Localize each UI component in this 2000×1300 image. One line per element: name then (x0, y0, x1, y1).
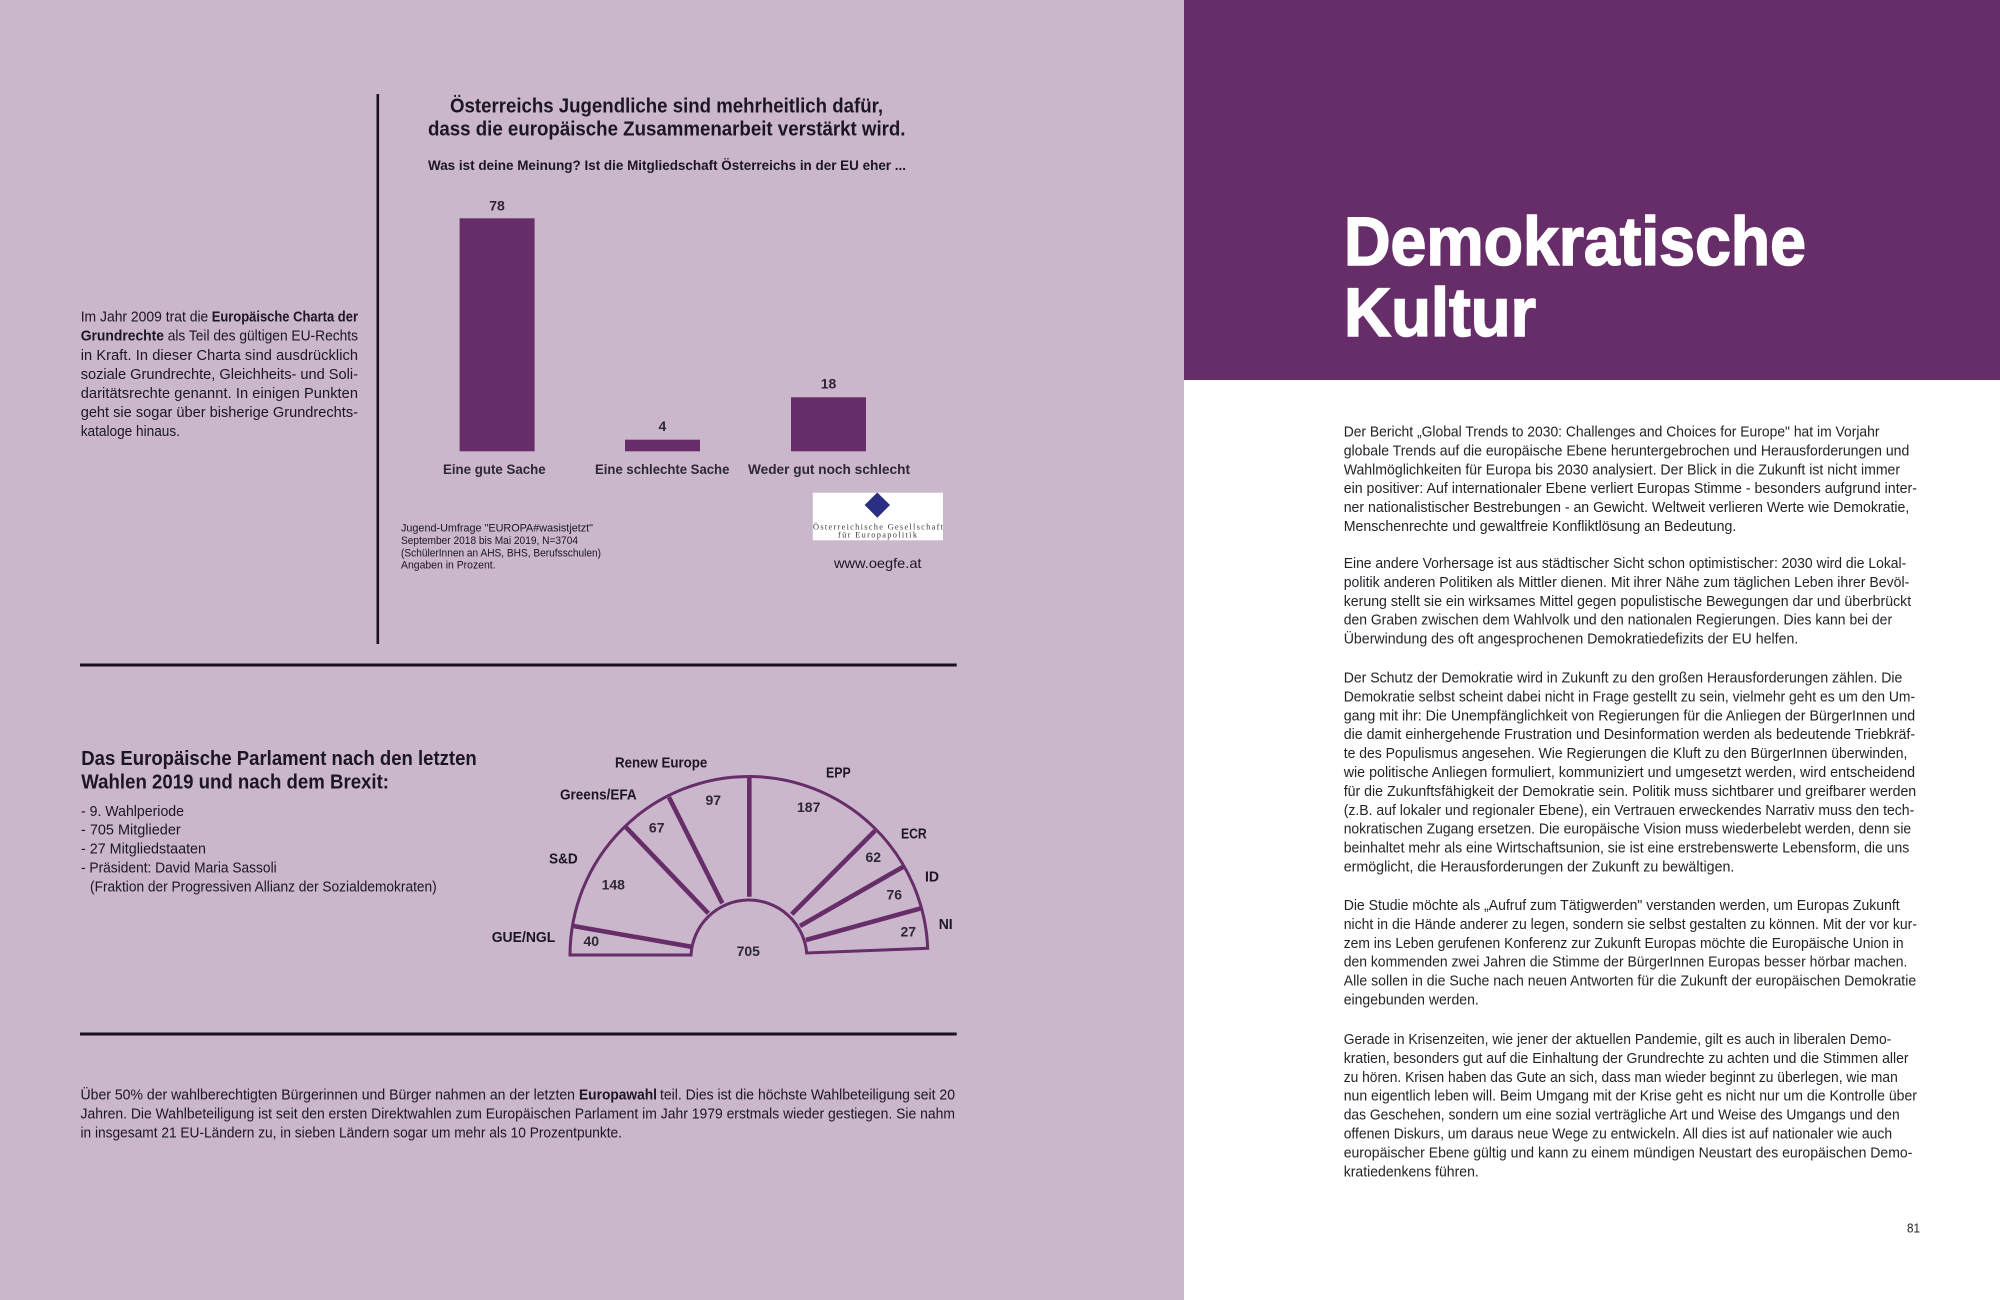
text block: article paragraph 4: nicht in die Hände anderer zu legen, sondern sie selbst gestalten zu können. Mit der vor kur- (1344, 917, 1917, 933)
text block: Charta der Grundrechte: als Teil des gültigen EU-Rechts (168, 329, 358, 345)
text block: article paragraph 3: Demokratie selbst scheint dabei nicht in Frage gestellt zu sein, vielmehr geht es um den Um- (1344, 689, 1915, 705)
heading: Europäisches Parlament (81, 747, 477, 793)
text block: article paragraph 2 (1344, 556, 1911, 648)
text block: parliament facts list: - 9. Wahlperiode (81, 804, 184, 820)
text block: article paragraph 5: kratiedenkens führen. (1344, 1164, 1479, 1180)
text block: article paragraph 4 (1344, 898, 1917, 1008)
text block: article paragraph 1: ner nationalistischer Bestrebungen - an Gewicht. Weltweit verlieren Werte wie Demokratie, (1344, 500, 1909, 516)
bar: Eine schlechte Sache 4: Eine schlechte Sache (595, 461, 730, 477)
text block: survey source note: (SchülerInnen an AHS, BHS, Berufsschulen) (401, 548, 601, 560)
bar: Eine schlechte Sache 4: 4 (659, 418, 667, 434)
text block: article paragraph 5: kratien, besonders gut auf die Einhaltung der Grundrechte zu achten und die Stimmen aller (1344, 1051, 1909, 1067)
text block: Europawahl turnout (80, 1085, 955, 1142)
text block: article paragraph 4: eingebunden werden. (1344, 992, 1479, 1008)
logo: Österreichische Gesellschaft für Europapolitik: Österreichische Gesellschaft (813, 522, 944, 531)
hemicycle seat counts (584, 792, 916, 959)
hemicycle seat counts: 40 (584, 933, 599, 949)
bar: Eine schlechte Sache 4 (595, 418, 730, 477)
hemicycle group names: Greens/EFA (560, 787, 637, 803)
text block: article paragraph 3: ermöglicht, die Herausforderungen der Zukunft zu bewältigen. (1344, 860, 1734, 876)
title: Demokratische Kultur: Demokratische (1344, 203, 1806, 280)
text block: article paragraph 3 (1343, 670, 1916, 876)
bar: Eine gute Sache 78: Eine gute Sache (443, 461, 546, 477)
hemicycle group names (492, 755, 953, 946)
panel: left lilac page background (0, 0, 1184, 1300)
text block: article paragraph 5: das Geschehen, sondern um eine sozial verträgliche Art und Weise des Umgangs und den (1344, 1108, 1900, 1124)
bar: Weder gut noch schlecht 18 (748, 376, 910, 477)
text block: article paragraph 2: den Graben zwischen dem Wahlvolk und den nationalen Regierungen. Dies kann bei der (1344, 613, 1892, 629)
title: Demokratische Kultur (1344, 203, 1806, 351)
text block: article paragraph 1: Menschenrechte und gewaltfreie Konfliktlösung an Bedeutung. (1344, 519, 1736, 535)
text block: Charta der Grundrechte: daritätsrechte genannt. In einigen Punkten (81, 386, 358, 402)
text block: article paragraph 4: Alle sollen in die Suche nach neuen Antworten für die Zukunft der europäischen Demokratie (1344, 974, 1916, 990)
hemicycle group dividers (573, 777, 921, 947)
hemicycle seat counts: 705 (737, 943, 760, 959)
hemicycle group names: NI (939, 917, 953, 933)
text block: article paragraph 3: wie politische Anliegen formuliert, kommuniziert und umgesetzt werden, wird entscheidend (1343, 765, 1915, 781)
text block: article paragraph 1 (1344, 424, 1917, 535)
text block: Europawahl turnout: teil. Dies ist die höchste Wahlbeteiligung seit 20 (660, 1087, 955, 1103)
title: Demokratische Kultur: Kultur (1344, 274, 1536, 351)
text block: Europawahl turnout: in insgesamt 21 EU-Ländern zu, in sieben Ländern sogar um mehr als 10 Prozentpunkte. (80, 1126, 622, 1142)
text block: Charta der Grundrechte: kataloge hinaus. (81, 424, 180, 440)
text block: survey source note (401, 523, 601, 571)
text block: article paragraph 1: Wahlmöglichkeiten für Europa bis 2030 analysiert. Der Blick in die Zukunft ist nicht immer (1344, 462, 1900, 478)
text block: Charta der Grundrechte: Grundrechte (81, 329, 164, 345)
hemicycle seat counts: 27 (901, 924, 916, 940)
hemicycle group names: EPP (826, 766, 851, 782)
text block: Charta der Grundrechte: in Kraft. In dieser Charta sind ausdrücklich (81, 348, 358, 364)
text block: article paragraph 1: globale Trends auf die europäische Ebene heruntergebrochen und Herausforderungen und (1344, 443, 1909, 459)
text block: article paragraph 1: Der Bericht „Global Trends to 2030: Challenges and Choices for Europe" hat im Vorjahr (1344, 424, 1880, 440)
text block: article paragraph 4: zem ins Leben gerufenen Konferenz zur Zukunft Europas möchte die Europäische Union in (1344, 936, 1904, 952)
heading: Europäisches Parlament: Wahlen 2019 und nach dem Brexit: (81, 770, 389, 793)
hemicycle seat counts: 97 (706, 792, 721, 808)
bar: Eine gute Sache 78: 78 (489, 198, 505, 214)
text block: article paragraph 4: den kommenden zwei Jahren die Stimme der BürgerInnen Europas besser hörbar machen. (1344, 955, 1907, 971)
panel: right purple title header (1184, 0, 2000, 380)
text block: survey source note: September 2018 bis Mai 2019, N=3704 (401, 535, 578, 547)
text block: parliament facts list: - 27 Mitgliedstaaten (81, 841, 206, 857)
text block: Charta der Grundrechte: geht sie sogar über bisherige Grundrechts- (81, 405, 358, 421)
icon: blue diamond with stars (865, 492, 890, 518)
logo: Österreichische Gesellschaft für Europapolitik (813, 492, 944, 540)
text block: article paragraph 5: nun eigentlich leben will. Beim Umgang mit der Krise geht es nicht nur um die Kontrolle über (1344, 1089, 1917, 1105)
hemicycle group names: ECR (901, 827, 927, 843)
text block: Charta der Grundrechte: Im Jahr 2009 trat die (81, 310, 208, 326)
text block: article paragraph 3: gang mit ihr: Die Unempfänglichkeit von Regierungen für die Anliegen der BürgerInnen und (1344, 708, 1915, 724)
text block: article paragraph 1: ein positiver: Auf internationaler Ebene verliert Europas Stimme - besonders aufgrund inter- (1344, 481, 1917, 497)
text: page number: 81 (1907, 1220, 1920, 1236)
text block: article paragraph 3: nokratischen Zugang ersetzen. Die europäische Vision muss wiederbelebt werden, denn sie (1344, 822, 1911, 838)
logo: Österreichische Gesellschaft für Europapolitik: für Europapolitik (838, 531, 918, 540)
text block: Europawahl turnout: Über 50% der wahlberechtigten Bürgerinnen und Bürger nahmen an der letzten (80, 1085, 575, 1103)
text block: parliament facts list: - Präsident: David Maria Sassoli (81, 860, 277, 876)
text block: survey source note: Jugend-Umfrage "EUROPA#wasistjetzt" (401, 523, 593, 535)
text block: article paragraph 2: kerung stellt sie ein wirksames Mittel gegen populistische Bewegungen dar und überbrückt (1344, 594, 1911, 610)
text block: article paragraph 3: Der Schutz der Demokratie wird in Zukunft zu den großen Herausforderungen zählen. Die (1344, 670, 1902, 686)
text block: parliament facts list: (Fraktion der Progressiven Allianz der Sozialdemokraten) (90, 880, 437, 896)
text: website url: www.oegfe.at (833, 555, 922, 571)
hemicycle seat counts: 76 (887, 886, 902, 902)
text block: article paragraph 5: offenen Diskurs, um daraus neue Wege zu entwickeln. All dies ist auf nationaler wie auch (1344, 1126, 1892, 1142)
text block: article paragraph 5 (1344, 1032, 1917, 1180)
hemicycle seat counts: 62 (866, 849, 881, 865)
hemicycle group names: ID (925, 869, 939, 885)
divider: upper horizontal rule (80, 664, 957, 666)
heading: bar chart title: dass die europäische Zusammenarbeit verstärkt wird. (428, 118, 906, 141)
text block: Charta der Grundrechte: soziale Grundrechte, Gleichheits- und Soli- (81, 367, 358, 383)
text block: Europawahl turnout: Europawahl (579, 1087, 657, 1103)
text block: article paragraph 3: beinhaltet mehr als eine Wirtschaftsunion, sie ist eine erstrebenswerte Lebensform, die uns (1344, 841, 1909, 857)
hemicycle seat counts: 67 (649, 820, 665, 836)
text block: article paragraph 2: politik anderen Politiken als Mittler dienen. Mit ihrer Nähe zum täglichen Leben ihrer Bevöl- (1344, 575, 1909, 591)
text block: Europawahl turnout: Jahren. Die Wahlbeteiligung ist seit den ersten Direktwahlen zum Europäischen Parlament im Jahr 1979 erstmals wieder gestiegen. Sie nahm (80, 1107, 955, 1123)
text block: article paragraph 3: die damit einhergehende Frustration und Desinformation werden als bedeutende Triebkräf- (1344, 727, 1915, 743)
chart: hemicycle of European Parliament seats (492, 755, 953, 959)
text block: article paragraph 5: Gerade in Krisenzeiten, wie jener der aktuellen Pandemie, gilt es auch in liberalen Demo- (1344, 1032, 1891, 1048)
hemicycle seat counts: 148 (602, 876, 625, 892)
text block: survey source note: Angaben in Prozent. (401, 559, 496, 571)
text block: article paragraph 2: Eine andere Vorhersage ist aus städtischer Sicht schon optimistischer: 2030 wird die Lokal- (1344, 556, 1906, 572)
text block: article paragraph 3: (z.B. auf lokaler und regionaler Ebene), ein Vertrauen erweckendes Narrativ muss den tech- (1344, 803, 1914, 819)
heading: bar chart title: Österreichs Jugendliche sind mehrheitlich dafür, (450, 95, 883, 118)
text block: article paragraph 2: Überwindung des oft angesprochenen Demokratiedefizits der EU helfen. (1344, 630, 1798, 648)
hemicycle group names: GUE/NGL (492, 930, 555, 946)
text block: Charta der Grundrechte: Europäische Charta der (212, 310, 358, 326)
text block: article paragraph 3: te des Populismus angesehen. Wie Regierungen die Kluft zu den BürgerInnen überwinden, (1344, 746, 1907, 762)
bar chart: EU membership opinion (443, 198, 910, 477)
text block: article paragraph 3: für die Zukunftsfähigkeit der Demokratie sein. Politik muss sichtbarer und greifbarer werden (1344, 784, 1916, 800)
hemicycle group names: Renew Europe (615, 755, 707, 771)
hemicycle outline (570, 776, 928, 955)
text block: Charta der Grundrechte (81, 310, 358, 440)
text block: article paragraph 5: zu hören. Krisen haben das Gute an sich, dass man wieder beginnt zu überlegen, wie man (1344, 1070, 1898, 1086)
divider: vertical rule beside the bar chart (376, 94, 379, 644)
bar: Weder gut noch schlecht 18: Weder gut noch schlecht (748, 461, 910, 477)
text block: article paragraph 4: Die Studie möchte als „Aufruf zum Tätigwerden" verstanden werden, um Europas Zukunft (1344, 898, 1900, 914)
text block: article paragraph 5: europäischer Ebene gültig und kann zu einem mündigen Neustart des europäischen Demo- (1344, 1145, 1913, 1161)
hemicycle group names: S&D (549, 851, 578, 867)
heading: Europäisches Parlament: Das Europäische Parlament nach den letzten (81, 747, 477, 770)
text block: parliament facts list: - 705 Mitglieder (81, 822, 181, 838)
heading: bar chart title (428, 95, 906, 141)
text block: parliament facts list (81, 804, 437, 896)
bar: Eine gute Sache 78 (443, 198, 546, 477)
divider: lower horizontal rule (80, 1032, 957, 1036)
hemicycle seat counts: 187 (797, 799, 821, 815)
bar: Weder gut noch schlecht 18: 18 (821, 376, 836, 392)
text: survey question: Was ist deine Meinung? Ist die Mitgliedschaft Österreichs in der EU eher ... (428, 157, 906, 173)
